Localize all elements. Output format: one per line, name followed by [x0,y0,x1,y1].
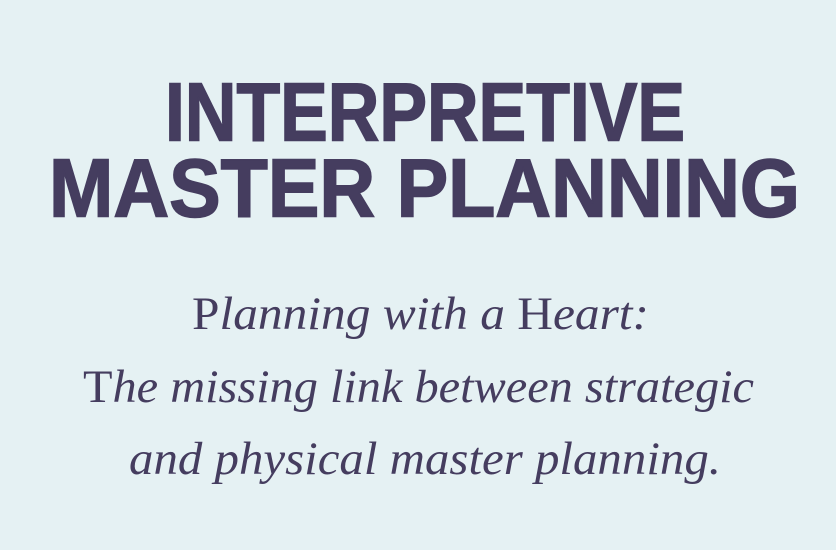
title: INTERPRETIVE [165,66,685,158]
subtitle: Planning with a Heart: [192,288,649,340]
subtitle: and physical master planning. [129,433,721,485]
subtitle: The missing link between strategic [83,361,754,413]
subtitle [83,288,754,485]
title [49,66,800,234]
title: MASTER PLANNING [49,142,800,234]
